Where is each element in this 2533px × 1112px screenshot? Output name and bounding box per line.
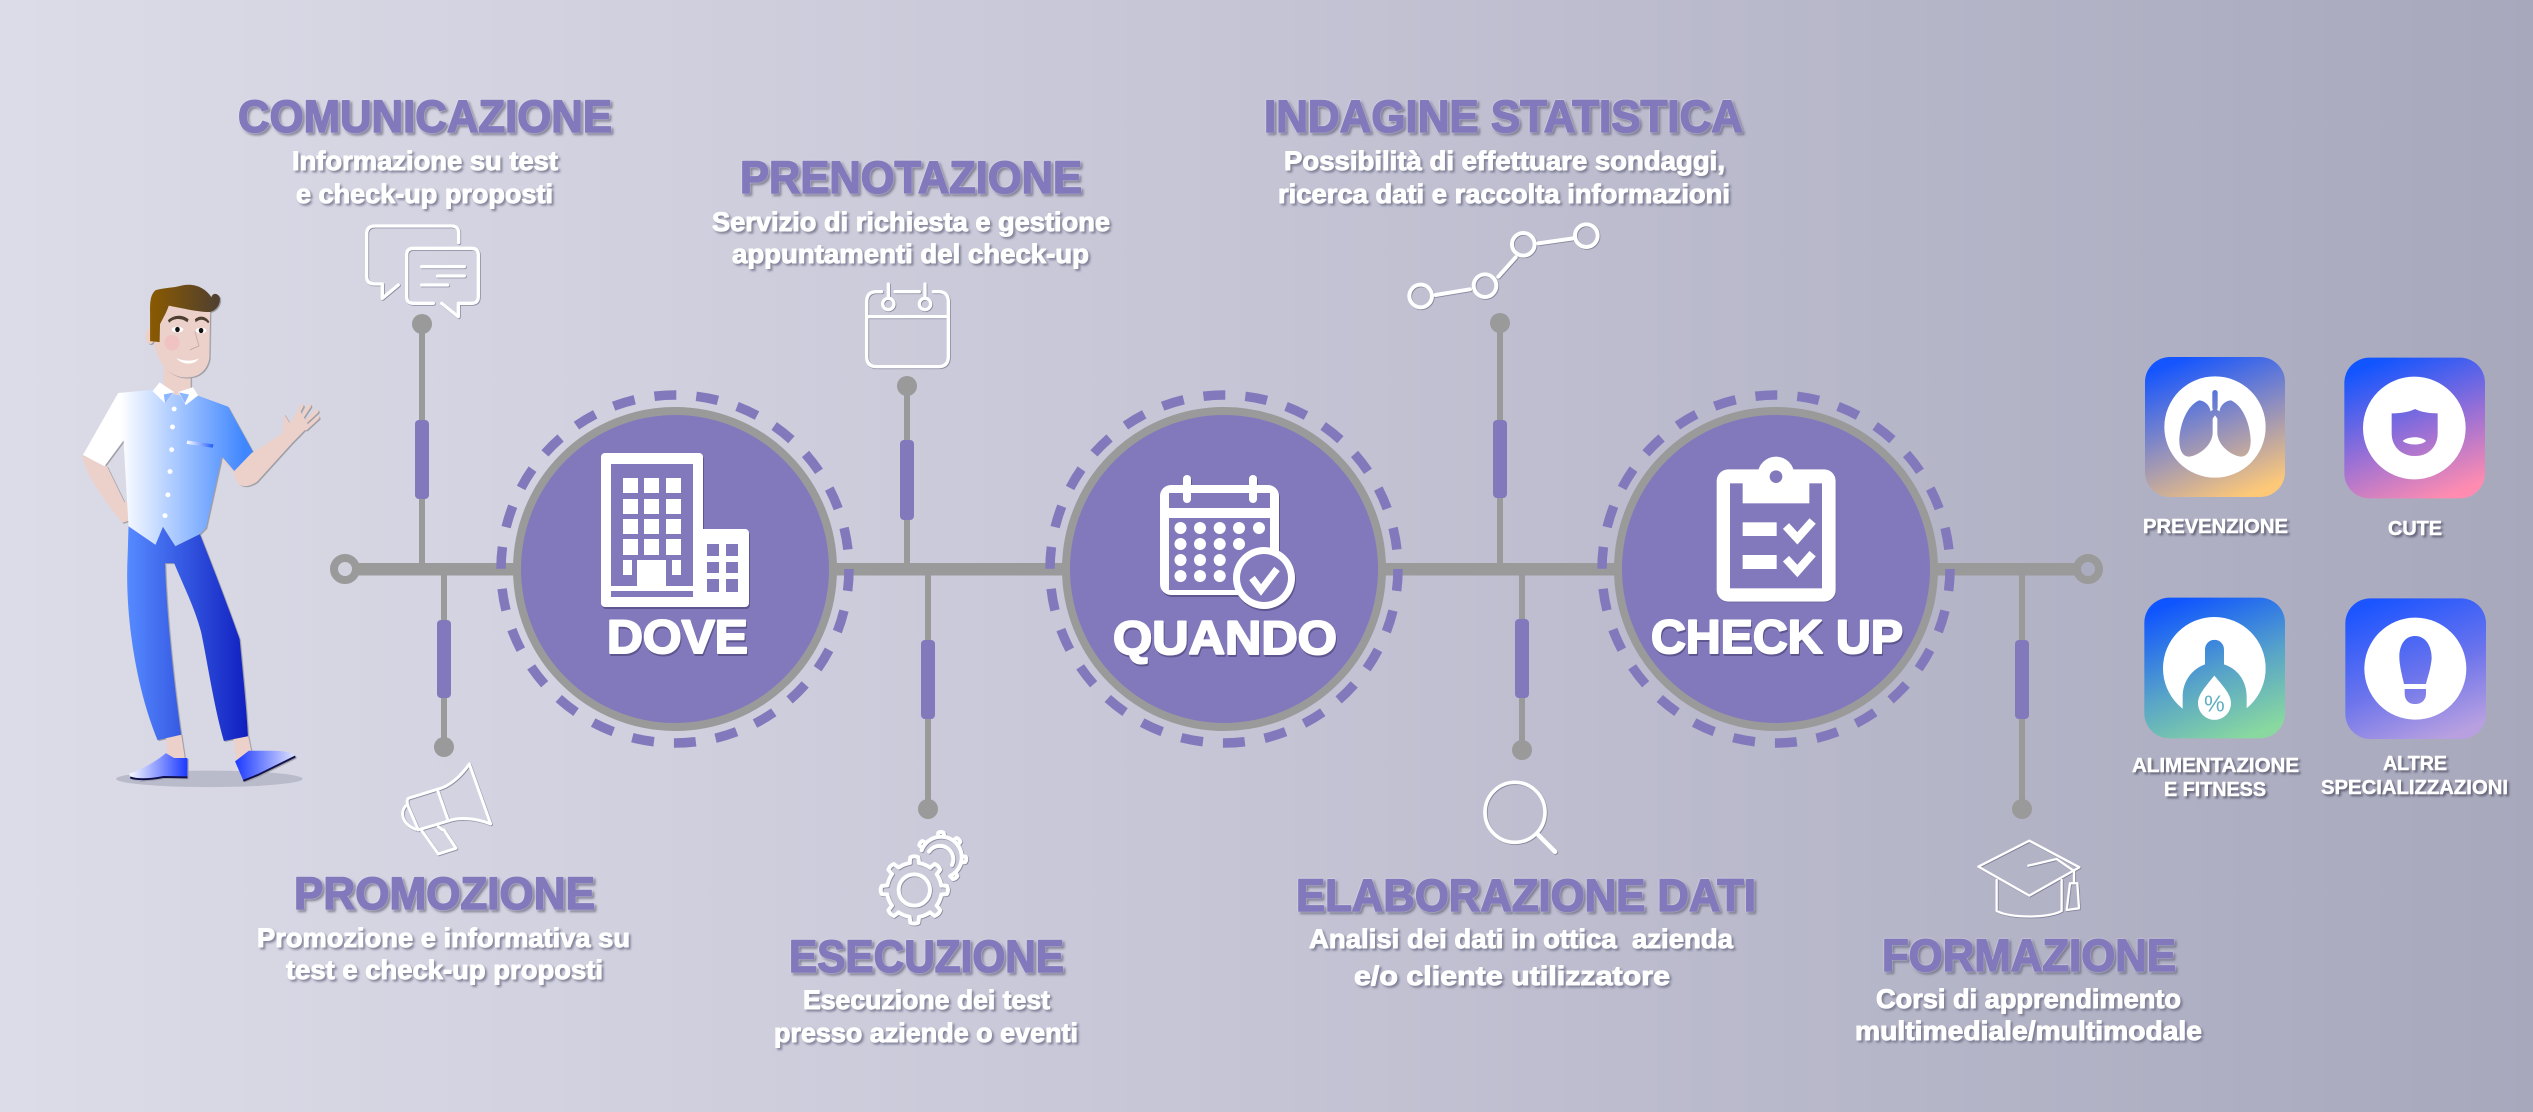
label: alimentazione e fitness: E FITNESS [2164,779,2266,801]
description [257,923,630,985]
tile: altre specializzazioni [2321,598,2508,799]
icon: megaphone [403,764,491,854]
collar and buttons [153,382,214,518]
connector: esecuzione [918,569,938,819]
block: elaborazione dati [1296,782,1756,991]
icon: gears [881,832,967,924]
label: alimentazione e fitness: ALIMENTAZIONE [2132,755,2299,777]
icon: trend line [1409,224,1598,307]
connector: prenotazione [897,376,917,569]
panel: check up [1602,395,1950,743]
block: esecuzione [774,832,1078,1048]
description: Possibilità di effettuare sondaggi, [1284,146,1725,176]
icon: building [601,453,749,607]
block: prenotazione [712,152,1110,367]
block: promozione [257,764,630,985]
head [146,285,220,377]
description: Servizio di richiesta e gestione [712,207,1110,237]
description: test e check-up proposti [286,955,603,985]
description: multimediale/multimodale [1855,1016,2202,1046]
character: man in blue shirt [82,285,318,787]
connector: indagine statistica [1490,313,1510,569]
icon: lungs [2179,390,2251,457]
description: Corsi di apprendimento [1876,984,2181,1014]
label: quando: QUANDO [1113,611,1337,664]
tile: alimentazione e fitness [2132,598,2299,801]
connector: elaborazione dati [1512,569,1532,760]
heading: PROMOZIONE [294,868,595,919]
connector: promozione [434,569,454,757]
icon: chat bubbles [367,226,478,317]
heading: ESECUZIONE [789,931,1064,982]
horizontal line [345,563,2088,576]
icon: clipboard [1717,457,1836,602]
panel: quando [1050,395,1398,743]
description [1855,984,2202,1046]
description [712,207,1110,269]
block: formazione [1855,841,2202,1046]
description [1309,924,1734,991]
block: comunicazione [238,91,612,317]
ground shadow [116,771,303,787]
label: altre specializzazioni: SPECIALIZZAZIONI [2321,777,2508,799]
panel: dove [501,395,849,743]
icon: footprint [2399,636,2432,704]
tile: cute [2344,358,2485,540]
tile: prevenzione [2143,357,2288,538]
figure body [82,365,318,781]
icon: face mask [2392,409,2438,456]
connector: formazione [2012,569,2032,819]
label: check up: CHECK UP [1651,610,1903,663]
description [292,146,558,209]
description [774,985,1078,1048]
heading: COMUNICAZIONE [238,91,612,142]
heading: ELABORAZIONE DATI [1296,870,1756,921]
label: prevenzione: PREVENZIONE [2143,516,2288,538]
description: appuntamenti del check-up [732,239,1089,269]
label: cute: CUTE [2388,518,2442,540]
description: Promozione e informativa su [257,923,630,953]
label: altre specializzazioni [2321,753,2508,799]
label: altre specializzazioni: ALTRE [2383,753,2447,775]
heading: PRENOTAZIONE [740,152,1082,203]
icon: magnifier [1485,782,1555,852]
icon: graduation cap [1978,841,2079,916]
block: indagine statistica [1264,91,1743,307]
timeline [334,313,2099,819]
connector: comunicazione [412,314,432,569]
icon: body silhouette with drop [2183,640,2247,723]
heading: INDAGINE STATISTICA [1264,91,1743,142]
timeline start node [334,558,356,580]
description: Esecuzione dei test [803,985,1050,1015]
description: e check-up proposti [296,179,553,209]
description [1278,146,1730,209]
description: e/o cliente utilizzatore [1354,961,1670,991]
panel: specializzazioni [2132,357,2508,801]
face [168,316,209,364]
icon: calendar [867,284,948,367]
description: Informazione su test [292,146,558,176]
description: Analisi dei dati in ottica azienda [1309,924,1734,954]
description: presso aziende o eventi [774,1018,1078,1048]
label: alimentazione e fitness [2132,755,2299,801]
label: dove: DOVE [607,610,748,663]
description: ricerca dati e raccolta informazioni [1278,179,1730,209]
icon: calendar with check [1160,475,1295,609]
heading: FORMAZIONE [1882,930,2176,981]
icon: body silhouette with drop: % [2204,691,2225,717]
timeline end node [2077,558,2099,580]
